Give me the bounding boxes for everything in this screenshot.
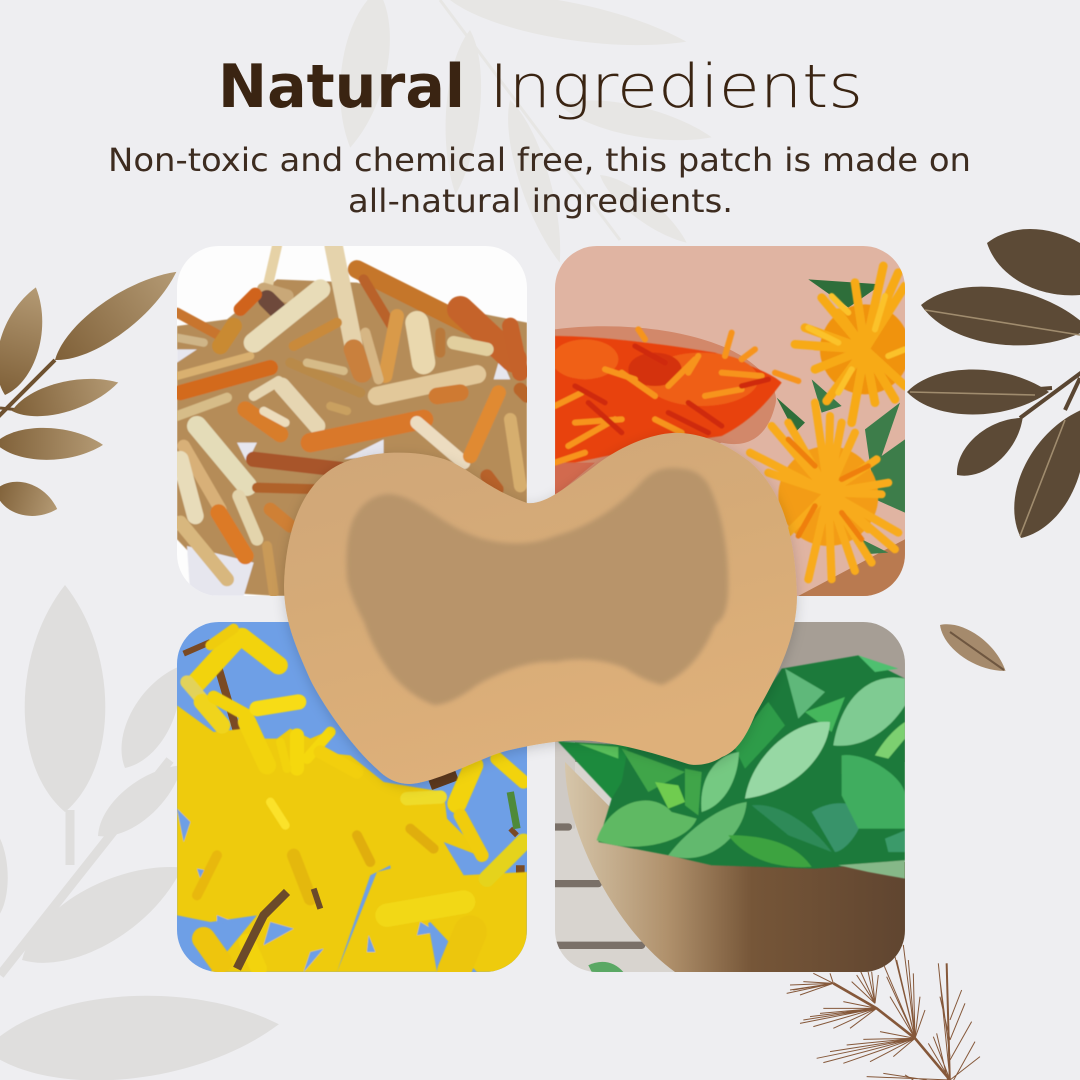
patch xyxy=(284,433,797,784)
patch inner pad xyxy=(346,468,728,705)
icon: small falling leaf xyxy=(932,614,1013,682)
title xyxy=(218,52,863,122)
faint leaves: bottom left xyxy=(0,585,282,1080)
subtitle xyxy=(108,141,971,220)
photo: dried orange peel xyxy=(177,246,527,596)
title: Ingredients xyxy=(489,52,863,122)
leaves: top left gold branch xyxy=(0,257,187,524)
photo: safflower xyxy=(552,246,910,596)
fern: bottom right xyxy=(787,945,980,1080)
faint leaves: top centre xyxy=(328,0,715,267)
photo: mint in bowl xyxy=(555,622,905,972)
title: Natural xyxy=(218,52,465,122)
leaves: top right dark branch xyxy=(907,214,1080,549)
subtitle: all-natural ingredients. xyxy=(348,182,733,220)
photo: forsythia xyxy=(177,622,527,972)
subtitle: Non-toxic and chemical free, this patch is made on xyxy=(108,141,971,179)
